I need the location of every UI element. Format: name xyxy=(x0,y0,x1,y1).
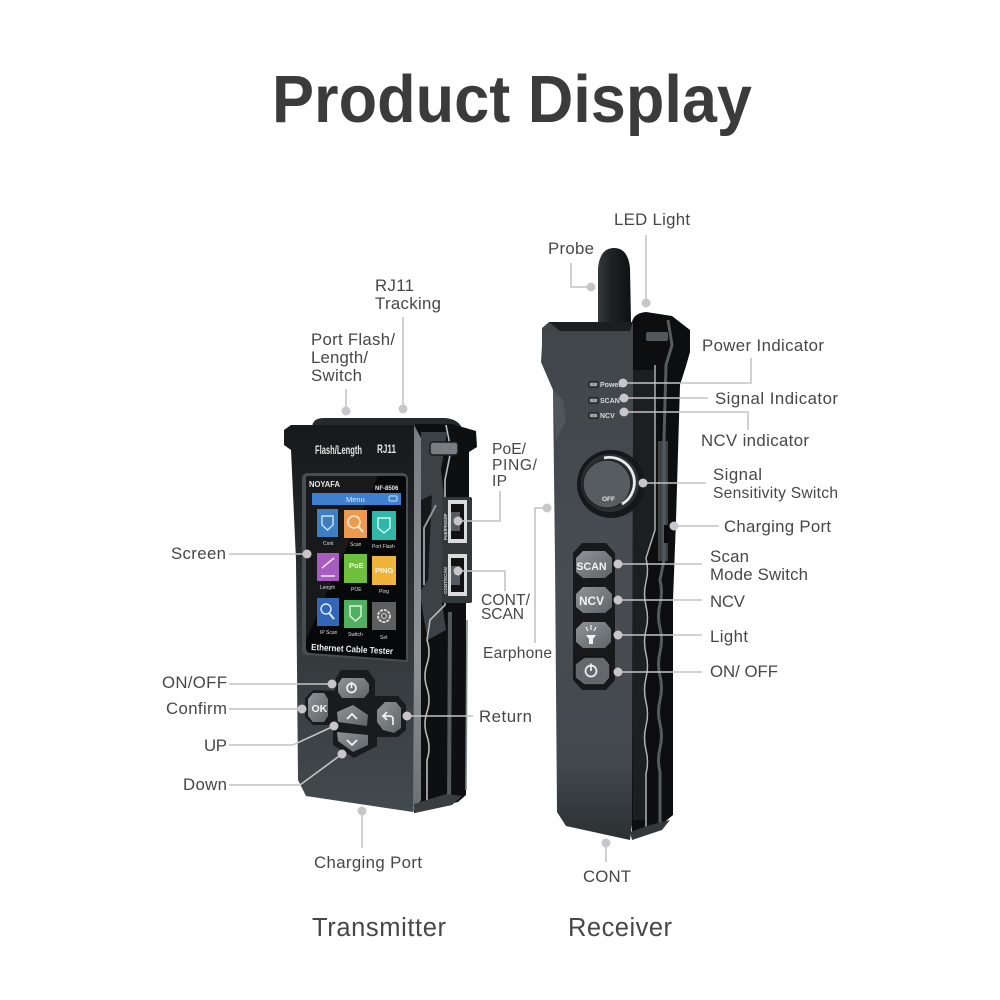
app: Length: Length xyxy=(320,585,336,591)
callout: CONT/SCAN: SCAN xyxy=(481,606,524,623)
callout: PoE/PING/IP: IP xyxy=(492,473,507,490)
app: PoE: PoE xyxy=(349,561,364,570)
indicator: SCAN xyxy=(589,398,620,405)
callout: LED Light xyxy=(614,210,690,308)
button: light xyxy=(576,622,611,648)
callout: Port Flash: Length/ xyxy=(311,348,368,367)
app: Switch xyxy=(344,600,367,638)
app: Ping: PING xyxy=(375,566,394,575)
button: down xyxy=(337,732,368,752)
app: Set: Set xyxy=(380,635,388,641)
indicator: NCV: NCV xyxy=(600,413,615,420)
button group frame xyxy=(573,543,615,690)
probe xyxy=(598,248,631,322)
button: SCAN xyxy=(576,551,612,578)
app: Switch: Switch xyxy=(348,632,363,638)
button: NCV: NCV xyxy=(579,596,604,608)
callout: Charging Port (transmitter): Charging Port xyxy=(314,853,422,872)
app: IP Scan xyxy=(317,598,339,636)
port panel xyxy=(442,497,472,603)
callout: Charging Port (receiver): Charging Port xyxy=(724,517,831,536)
knob xyxy=(577,450,645,518)
callout: NCV: NCV xyxy=(710,592,746,611)
callout: Signal Indicator xyxy=(620,389,838,408)
transmitter front edge band xyxy=(413,425,421,812)
callout: Confirm: Confirm xyxy=(166,699,227,718)
bottom foot xyxy=(630,820,670,840)
callout: PoE/PING/IP: PoE/ xyxy=(492,441,527,458)
receiver front face xyxy=(541,322,633,840)
callout: ON/OFF xyxy=(162,673,336,692)
callout: NCV indicator xyxy=(620,408,809,450)
button: return xyxy=(377,702,401,733)
callout: Probe: Probe xyxy=(548,239,594,258)
menu bar xyxy=(312,493,401,505)
transmitter top cap xyxy=(312,418,462,428)
bottom foot xyxy=(414,794,462,813)
transmitter side housing xyxy=(414,424,477,813)
button: up xyxy=(337,705,368,726)
caption: Receiver: Receiver xyxy=(568,914,672,942)
callout: Power Indicator: Power Indicator xyxy=(702,336,824,355)
port panel: PoE/PING/IP xyxy=(443,513,448,540)
transmitter side ribs xyxy=(425,425,451,802)
button: power xyxy=(575,657,610,685)
callout: CONT/SCAN xyxy=(454,566,531,623)
callout: Earphone xyxy=(483,504,552,662)
receiver side housing xyxy=(632,312,690,840)
app: PoE: POE xyxy=(351,587,362,593)
callout: NCV xyxy=(614,592,746,611)
app: IP Scan: IP Scan xyxy=(320,630,338,636)
app: PoE xyxy=(344,554,367,593)
callout: Earphone: Earphone xyxy=(483,645,552,662)
callout: Port Flash: Port Flash/ xyxy=(311,330,395,349)
port panel: CONT/SCAN xyxy=(443,567,448,594)
callout: Light: Light xyxy=(710,627,748,646)
screen: NF-8506 xyxy=(375,486,399,492)
callout: Screen: Screen xyxy=(171,544,226,563)
callout: Signal Sensitivity Switch: Sensitivity Switch xyxy=(713,485,838,502)
button: SCAN: SCAN xyxy=(576,561,607,573)
callout: CONT xyxy=(583,838,631,886)
button: OK: OK xyxy=(312,703,328,715)
keypad frame xyxy=(305,670,406,758)
brand: NOYAFA xyxy=(309,480,340,489)
callout: RJ11 Tracking: RJ11 xyxy=(375,276,414,295)
callout: CONT/SCAN: CONT/ xyxy=(481,592,531,609)
callout: Confirm xyxy=(166,699,306,718)
callout: Signal Sensitivity Switch: Signal xyxy=(713,465,762,484)
callout: UP xyxy=(204,722,338,755)
callout: ON/ OFF xyxy=(614,662,778,681)
callout: Down xyxy=(183,750,346,794)
receiver side detail xyxy=(633,370,654,820)
transmitter front face xyxy=(284,425,420,812)
callout: Return xyxy=(402,707,532,726)
callout: Port Flash: Switch xyxy=(311,366,362,385)
button: NCV xyxy=(576,587,612,613)
screen: Menu xyxy=(346,495,365,504)
callout: Signal Sensitivity Switch xyxy=(638,465,838,502)
callout: Charging Port (transmitter) xyxy=(314,806,422,872)
callout: Power Indicator xyxy=(618,336,824,388)
app: Cont xyxy=(317,509,338,547)
top print: Flash/Length xyxy=(315,445,362,457)
device: receiver xyxy=(541,248,690,840)
callout: PoE/PING/IP: PING/ xyxy=(492,457,538,474)
device: transmitter: RJ11 xyxy=(377,444,396,456)
callout: Probe xyxy=(548,239,596,292)
callout: Charging Port (receiver) xyxy=(670,517,831,536)
callout: RJ11 Tracking: Tracking xyxy=(375,294,441,313)
callout: Scan Mode Switch xyxy=(614,547,808,584)
side strap slot xyxy=(430,442,458,455)
app: Length xyxy=(317,553,339,591)
app: Ping: Ping xyxy=(379,589,389,595)
callout: Down: Down xyxy=(183,775,227,794)
button: power xyxy=(338,678,369,698)
screen xyxy=(306,476,406,660)
callout: ON/OFF: ON/OFF xyxy=(162,673,227,692)
callout: UP: UP xyxy=(204,736,227,755)
app: Scan: Scan xyxy=(350,542,362,548)
callout: PoE/PING/IP xyxy=(454,441,538,526)
app: Set xyxy=(372,602,396,641)
app: Scan xyxy=(344,510,367,548)
callout: Signal Indicator: Signal Indicator xyxy=(715,389,838,408)
app: Cont: Cont xyxy=(323,541,334,547)
callout: CONT: CONT xyxy=(583,867,631,886)
app: Port Flash: Port Flash xyxy=(372,544,395,550)
port: PoE/PING/IP xyxy=(448,500,467,543)
app: Port Flash xyxy=(372,511,396,550)
callout: LED Light: LED Light xyxy=(614,210,690,229)
caption: Transmitter: Transmitter xyxy=(312,914,446,942)
knob: OFF xyxy=(602,496,615,503)
callout: Port Flash xyxy=(311,330,395,416)
callout: RJ11 Tracking xyxy=(375,276,441,414)
callout: Scan Mode Switch: Scan xyxy=(710,547,749,566)
callout: Return: Return xyxy=(479,707,532,726)
callout: ON/ OFF: ON/ OFF xyxy=(710,662,778,681)
indicator: SCAN: SCAN xyxy=(600,398,620,405)
callout: Scan Mode Switch: Mode Switch xyxy=(710,565,808,584)
callout: NCV indicator: NCV indicator xyxy=(701,431,809,450)
device: transmitter xyxy=(284,418,477,813)
screen caption: Ethernet Cable Tester xyxy=(311,642,394,656)
app: Ping xyxy=(372,556,396,595)
title: Product Display xyxy=(272,62,752,137)
screen bezel xyxy=(302,473,408,662)
indicator: NCV xyxy=(589,413,615,420)
indicator: Power xyxy=(589,382,621,389)
transmitter upper side panel xyxy=(421,432,447,640)
callout: Light xyxy=(614,627,748,646)
callout: Screen xyxy=(171,544,312,563)
indicator: Power: Power xyxy=(600,382,621,389)
button: OK xyxy=(308,693,328,722)
port: CONT/SCAN xyxy=(448,554,467,596)
